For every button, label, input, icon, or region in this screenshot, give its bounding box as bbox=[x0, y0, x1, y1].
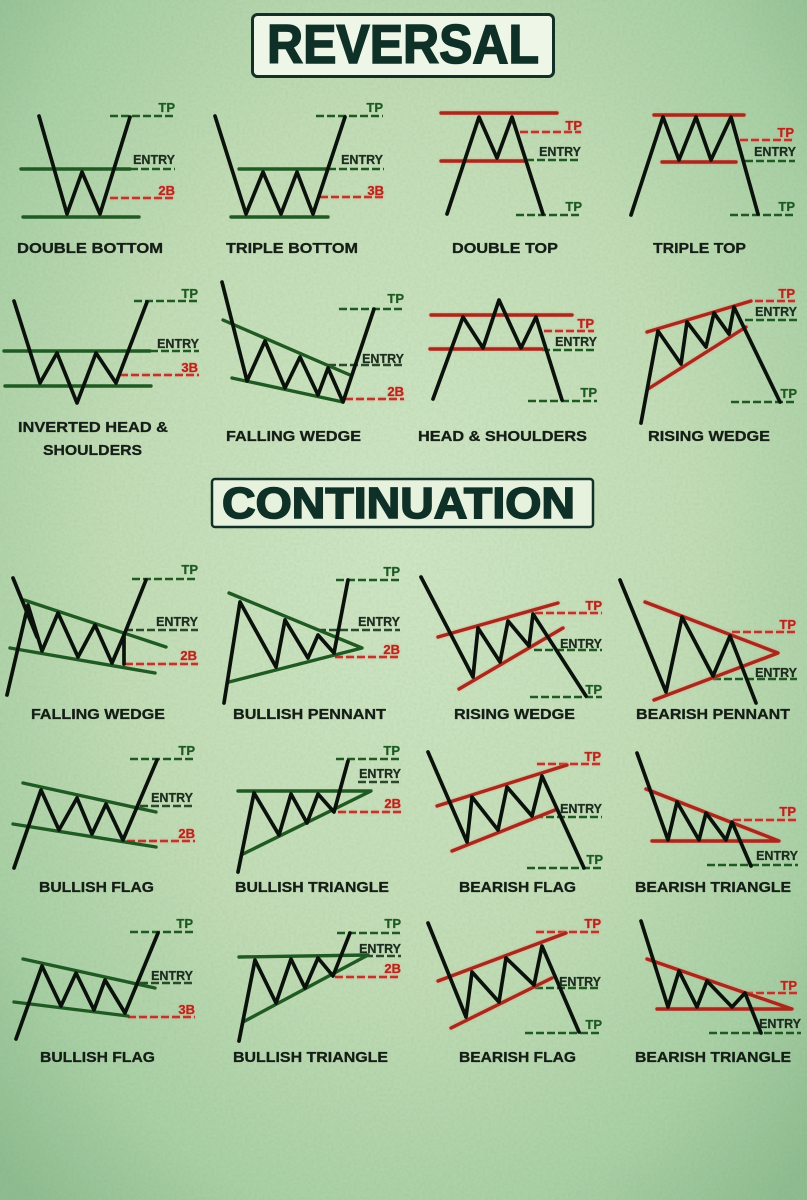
pattern: inverted head and shoulders: SHOULDERS bbox=[43, 442, 142, 459]
pattern: bearish triangle, row two: ENTRY bbox=[756, 849, 799, 863]
pattern: rising wedge continuation: ENTRY bbox=[560, 637, 603, 651]
title: CONTINUATION: CONTINUATION bbox=[222, 479, 575, 528]
pattern: double top: ENTRY bbox=[539, 145, 582, 159]
pattern: triple top: TRIPLE TOP bbox=[653, 240, 746, 257]
pattern: rising wedge continuation bbox=[421, 577, 603, 723]
pattern: falling wedge continuation bbox=[7, 562, 199, 723]
pattern: rising wedge continuation: TP bbox=[585, 598, 602, 613]
pattern: double top bbox=[441, 113, 582, 257]
pattern: bearish flag, row two: BEARISH FLAG bbox=[459, 879, 576, 896]
pattern: triple top: ENTRY bbox=[754, 145, 797, 159]
pattern: double top: DOUBLE TOP bbox=[452, 240, 558, 257]
pattern: falling wedge continuation: FALLING WEDGE bbox=[31, 706, 165, 723]
pattern: bearish flag, row two bbox=[428, 749, 603, 896]
pattern: double top: TP bbox=[565, 118, 582, 133]
pattern: triple bottom: ENTRY bbox=[341, 153, 384, 167]
pattern: bullish pennant: TP bbox=[383, 564, 400, 579]
pattern: bearish triangle, row three bbox=[635, 921, 802, 1066]
pattern: bearish flag, row two: TP bbox=[586, 852, 603, 867]
pattern: bullish pennant: BULLISH PENNANT bbox=[233, 706, 386, 723]
pattern: rising wedge continuation: TP bbox=[585, 682, 602, 697]
pattern: triple top: TP bbox=[777, 125, 794, 140]
pattern: inverted head and shoulders: ENTRY bbox=[157, 337, 200, 351]
pattern: head and shoulders bbox=[418, 300, 598, 445]
pattern: bearish triangle, row three: TP bbox=[780, 978, 797, 993]
pattern: double bottom: 2B bbox=[158, 183, 175, 198]
pattern: bullish triangle, row two: ENTRY bbox=[359, 767, 402, 781]
pattern: bullish triangle, row three: TP bbox=[384, 916, 401, 931]
pattern: bearish triangle, row two: TP bbox=[779, 804, 796, 819]
pattern: rising wedge reversal: TP bbox=[778, 286, 795, 301]
pattern: rising wedge continuation: RISING WEDGE bbox=[454, 706, 575, 723]
pattern: bearish flag, row three: ENTRY bbox=[559, 975, 602, 989]
pattern: bullish triangle, row two bbox=[235, 743, 402, 896]
pattern: inverted head and shoulders: 3B bbox=[181, 360, 198, 375]
pattern: double bottom: ENTRY bbox=[133, 153, 176, 167]
pattern: bearish triangle, row two bbox=[635, 753, 799, 896]
pattern: inverted head and shoulders: INVERTED HEAD & bbox=[18, 419, 168, 436]
pattern: bearish flag, row three: BEARISH FLAG bbox=[459, 1049, 576, 1066]
pattern: bullish pennant: 2B bbox=[383, 642, 400, 657]
pattern: bullish triangle, row two: BULLISH TRIANGLE bbox=[235, 879, 389, 896]
pattern: bullish flag, row two: BULLISH FLAG bbox=[39, 879, 154, 896]
pattern: bearish flag, row three: TP bbox=[585, 1017, 602, 1032]
pattern: bullish triangle, row three bbox=[233, 916, 402, 1066]
pattern: bullish triangle, row three: 2B bbox=[384, 961, 401, 976]
pattern: falling wedge reversal bbox=[222, 282, 405, 445]
pattern: falling wedge reversal: 2B bbox=[387, 384, 404, 399]
pattern: bullish flag, row two: TP bbox=[178, 743, 195, 758]
pattern: double bottom: DOUBLE BOTTOM bbox=[17, 240, 163, 257]
pattern: inverted head and shoulders: TP bbox=[181, 286, 198, 301]
pattern: bearish flag, row three: TP bbox=[584, 916, 601, 931]
pattern: falling wedge continuation: TP bbox=[181, 562, 198, 577]
title: REVERSAL: REVERSAL bbox=[267, 13, 539, 75]
pattern: bullish flag, row two: 2B bbox=[178, 826, 195, 841]
pattern: triple bottom bbox=[215, 100, 384, 257]
pattern: bearish pennant bbox=[620, 580, 798, 723]
pattern: bearish flag, row two: TP bbox=[584, 749, 601, 764]
pattern: bullish flag, row two bbox=[13, 743, 195, 896]
pattern: bullish triangle, row two: 2B bbox=[384, 796, 401, 811]
pattern: bullish triangle, row two: TP bbox=[383, 743, 400, 758]
pattern: double top: TP bbox=[565, 199, 582, 214]
pattern: bullish flag, row three bbox=[14, 916, 195, 1066]
pattern: bearish pennant: BEARISH PENNANT bbox=[636, 706, 790, 723]
pattern: bearish pennant: ENTRY bbox=[755, 666, 798, 680]
pattern: bullish flag, row three: 3B bbox=[178, 1002, 195, 1017]
pattern: bullish pennant bbox=[224, 564, 401, 723]
pattern: falling wedge reversal: FALLING WEDGE bbox=[226, 428, 361, 445]
pattern: head and shoulders: TP bbox=[577, 316, 594, 331]
pattern: triple bottom: TRIPLE BOTTOM bbox=[226, 240, 358, 257]
pattern: falling wedge reversal: ENTRY bbox=[362, 352, 405, 366]
pattern: double bottom: TP bbox=[158, 100, 175, 115]
pattern: rising wedge reversal: RISING WEDGE bbox=[648, 428, 770, 445]
pattern: bearish triangle, row two: BEARISH TRIANGLE bbox=[635, 879, 791, 896]
pattern: bullish triangle, row three: ENTRY bbox=[359, 942, 402, 956]
pattern: head and shoulders: ENTRY bbox=[555, 335, 598, 349]
pattern: rising wedge reversal bbox=[641, 286, 798, 445]
pattern: rising wedge reversal: ENTRY bbox=[755, 305, 798, 319]
pattern: falling wedge continuation: 2B bbox=[180, 648, 197, 663]
pattern: bearish flag, row two: ENTRY bbox=[560, 802, 603, 816]
pattern: triple top: TP bbox=[778, 199, 795, 214]
pattern: head and shoulders: TP bbox=[580, 385, 597, 400]
pattern: bullish flag, row three: ENTRY bbox=[151, 969, 194, 983]
pattern: bullish flag, row three: BULLISH FLAG bbox=[40, 1049, 155, 1066]
pattern: bullish flag, row three: TP bbox=[176, 916, 193, 931]
pattern: rising wedge reversal: TP bbox=[780, 386, 797, 401]
pattern: double bottom bbox=[17, 100, 176, 257]
pattern: head and shoulders: HEAD & SHOULDERS bbox=[418, 428, 587, 445]
pattern: bearish flag, row three bbox=[428, 916, 602, 1066]
pattern: bearish pennant: TP bbox=[779, 617, 796, 632]
pattern: triple bottom: TP bbox=[366, 100, 383, 115]
pattern: triple bottom: 3B bbox=[367, 183, 384, 198]
pattern: falling wedge continuation: ENTRY bbox=[156, 615, 199, 629]
pattern: bullish pennant: ENTRY bbox=[358, 615, 401, 629]
pattern: triple top bbox=[631, 115, 797, 257]
pattern: bearish triangle, row three: ENTRY bbox=[759, 1017, 802, 1031]
pattern: falling wedge reversal: TP bbox=[387, 291, 404, 306]
pattern: inverted head and shoulders bbox=[4, 286, 200, 459]
pattern: bearish triangle, row three: BEARISH TRIANGLE bbox=[635, 1049, 791, 1066]
pattern: bullish triangle, row three: BULLISH TRIANGLE bbox=[233, 1049, 388, 1066]
pattern: bullish flag, row two: ENTRY bbox=[151, 791, 194, 805]
